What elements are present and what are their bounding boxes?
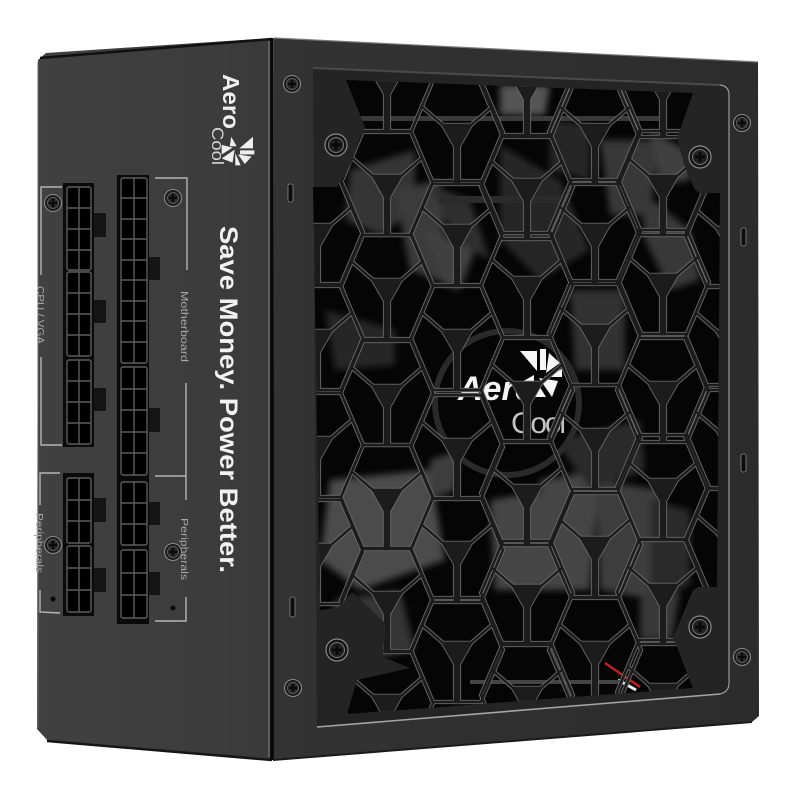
connector labels and brackets: Motherboard [178, 291, 189, 362]
panel: side of the unit [33, 38, 272, 760]
connector labels and brackets: Peripherals [33, 513, 44, 573]
logo on side: Cool [208, 127, 227, 165]
raised guard plate [313, 68, 729, 727]
connector labels and brackets [33, 178, 189, 621]
hub logo: Cool [511, 407, 566, 440]
connector: right column [117, 175, 160, 624]
front screws [284, 76, 750, 696]
connector: left column [63, 183, 106, 616]
connector labels and brackets: Peripherals [178, 518, 189, 580]
connector labels and brackets: CPU / VGA [34, 286, 45, 344]
fan hub [435, 331, 579, 475]
horizontal heat-sink bands [360, 116, 660, 684]
side screws [44, 190, 182, 610]
body edges [269, 38, 758, 760]
logo on side: Aero [218, 74, 244, 129]
hexagonal fan guard [314, 81, 720, 714]
fan blades [320, 85, 700, 660]
front slots [288, 184, 746, 617]
logo on side [208, 74, 254, 165]
grille opening with fan [313, 80, 720, 714]
slogan: Save Money. Power Better. [214, 226, 242, 573]
plate edge highlights [313, 68, 729, 727]
wire bundle [605, 663, 640, 690]
hub logo: Aero [457, 370, 535, 408]
hub logo [457, 349, 566, 440]
panel: front face [269, 28, 777, 760]
